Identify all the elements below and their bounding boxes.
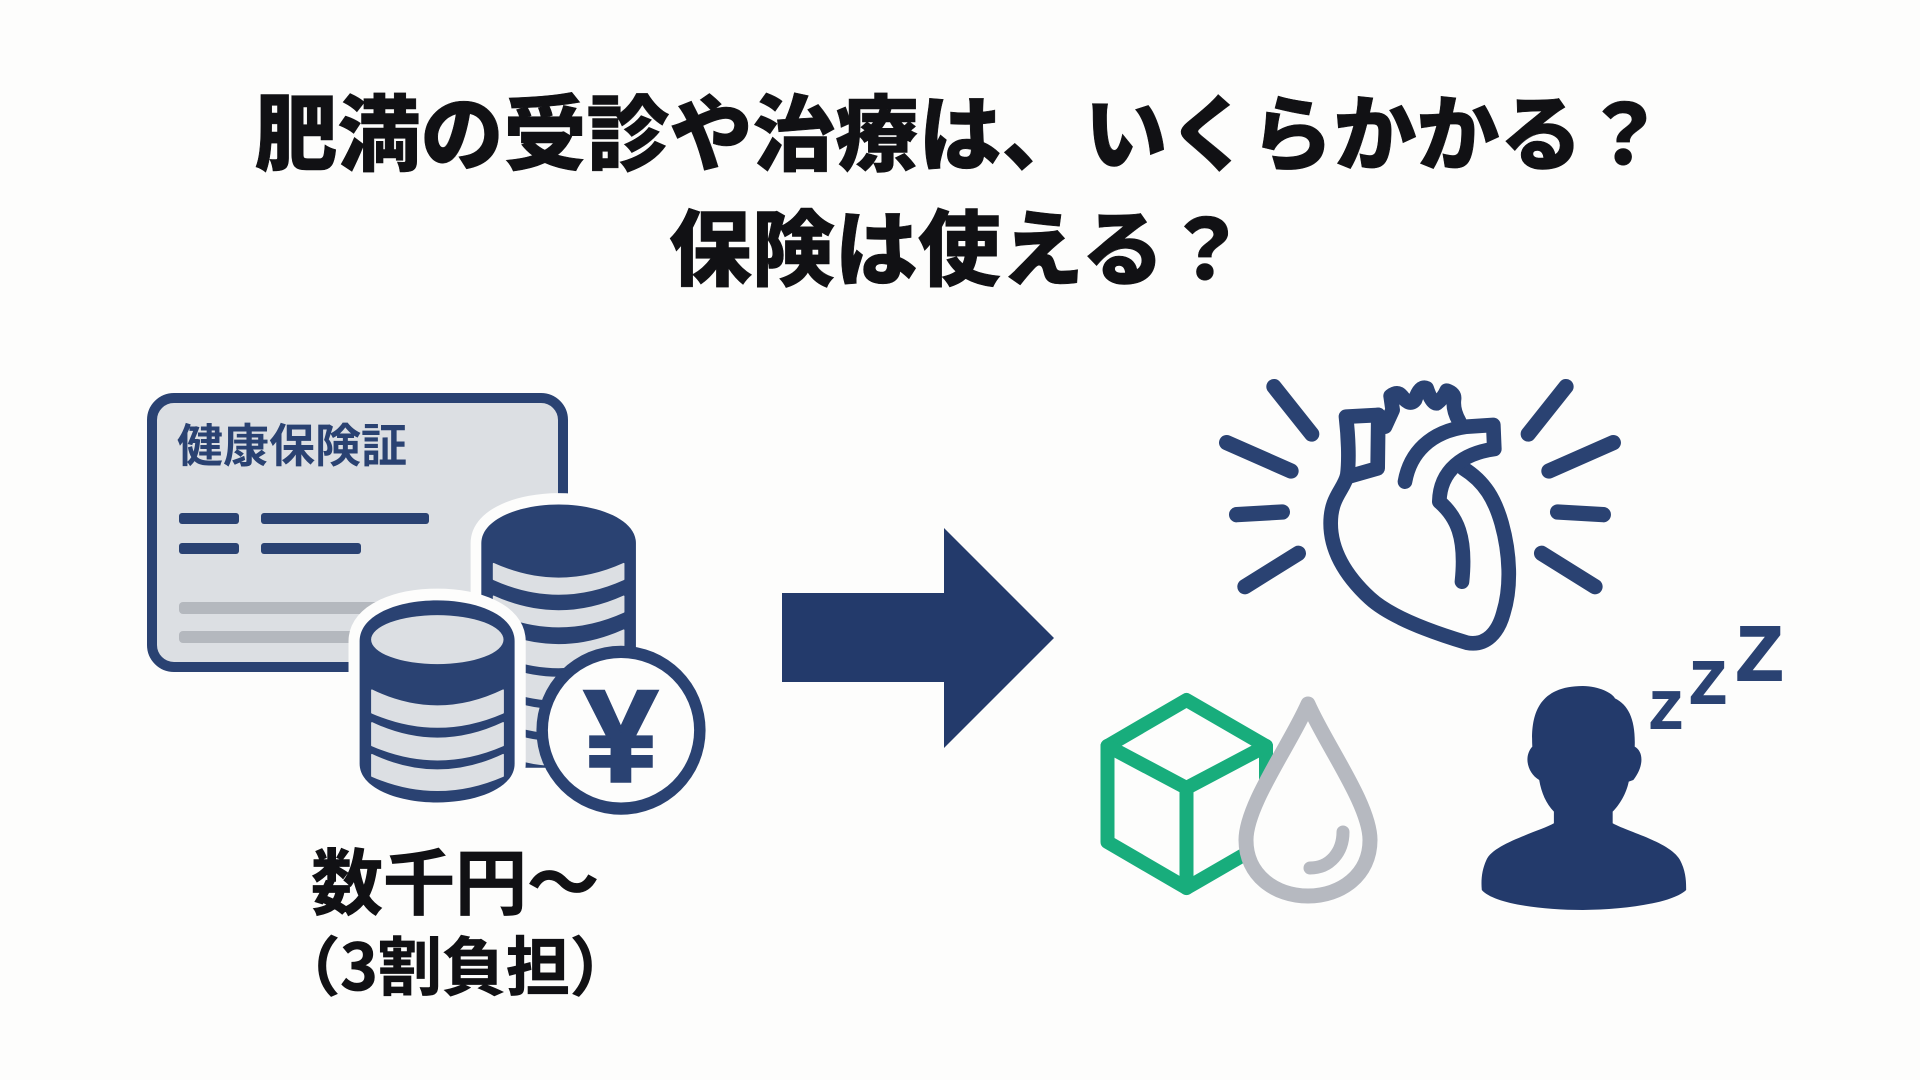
person silhouette	[1481, 686, 1686, 910]
sleep letters: Z	[1650, 682, 1682, 740]
sleep letters: Z	[1736, 611, 1783, 697]
icon: heart with pulse rays	[1227, 387, 1613, 643]
card body	[152, 398, 563, 667]
sleep letters: Z	[1690, 650, 1726, 716]
yen sign: ¥	[585, 663, 657, 809]
icon: water drop	[1246, 704, 1370, 896]
icon: coin stacks with yen coin	[360, 505, 706, 815]
title: 保険は使える？	[669, 183, 1247, 303]
heart outline	[1331, 388, 1509, 643]
yen coin disc	[536, 646, 706, 815]
arrow	[782, 528, 1054, 748]
sleep letters	[1650, 611, 1783, 740]
title	[254, 68, 1666, 303]
cost label: （3割負担）	[276, 917, 634, 1009]
icon: fat cube	[1108, 700, 1266, 888]
front coin stack	[360, 600, 515, 802]
cost label	[276, 825, 634, 1009]
coin artwork	[360, 505, 706, 815]
card text lines	[179, 513, 429, 554]
title: 肥満の受診や治療は、いくらかかる？	[254, 68, 1666, 188]
back coin stack	[481, 505, 636, 768]
pulse rays	[1227, 387, 1613, 587]
cost label: 数千円〜	[311, 825, 599, 930]
icon: sleeping person	[1481, 611, 1783, 910]
icon: health insurance card	[152, 398, 563, 667]
card grey lines	[179, 602, 379, 643]
card heading: 健康保険証	[177, 410, 407, 476]
